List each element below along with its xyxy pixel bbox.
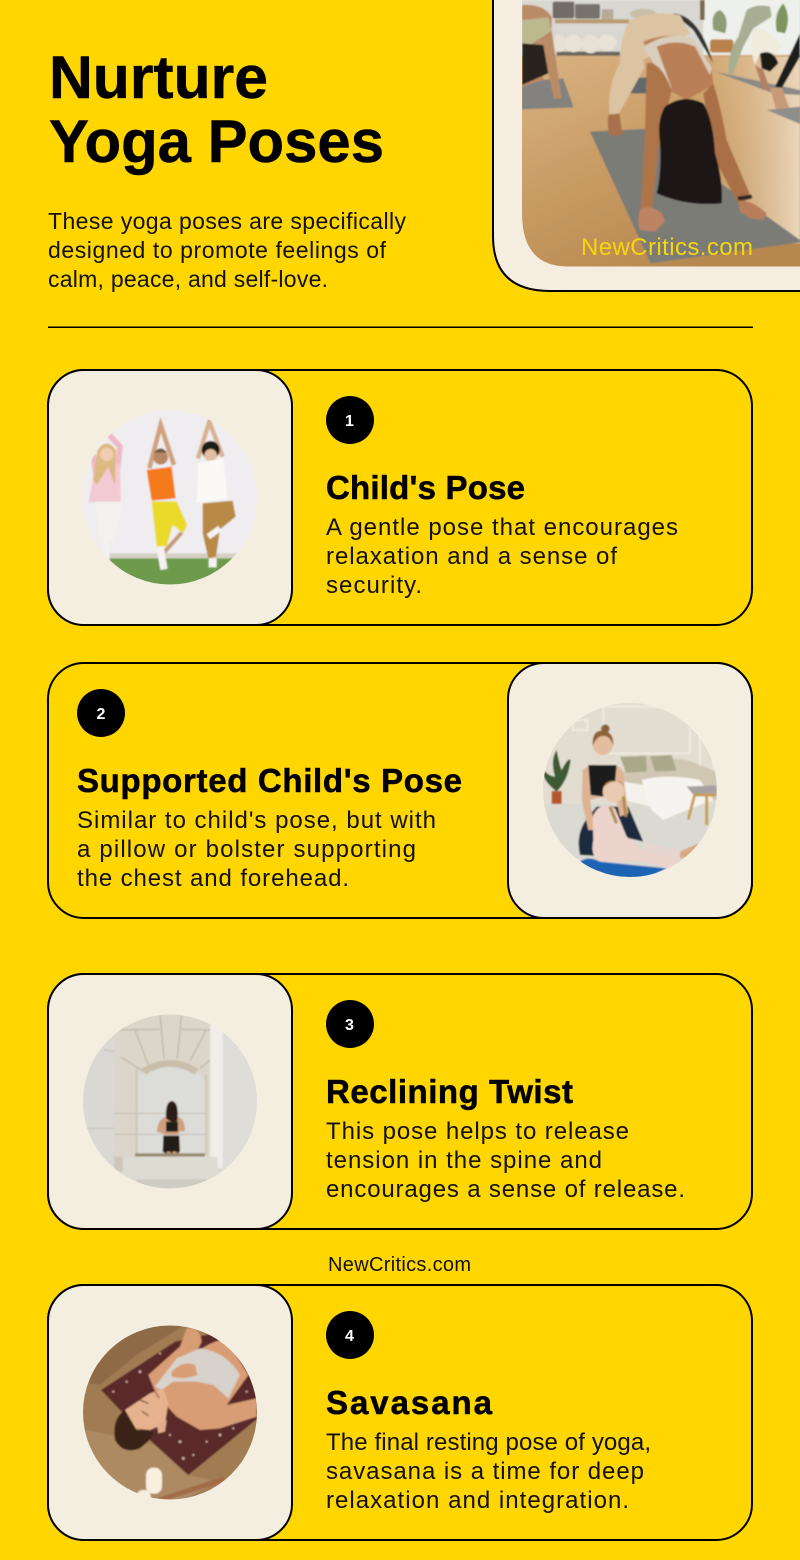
intro text: calm, peace, and self-love.	[48, 266, 328, 292]
card outline	[48, 663, 752, 918]
badge 1	[326, 396, 374, 444]
description: the chest and forehead.	[77, 865, 349, 892]
description: savasana is a time for deep	[326, 1458, 644, 1485]
image tile	[48, 370, 292, 625]
badge 2: 2	[97, 706, 106, 723]
photo: mother and daughter in bedroom	[540, 700, 720, 880]
photo: woman resting on mat	[80, 1322, 260, 1503]
heading: Savasana	[326, 1384, 493, 1421]
photo: woman in stone niche	[80, 1012, 260, 1192]
badge 2	[77, 689, 125, 737]
badge 4	[326, 1311, 374, 1359]
heading: Supported Child's Pose	[77, 762, 462, 799]
panel: Reclining Twist	[48, 974, 752, 1229]
description: The final resting pose of yoga,	[326, 1429, 651, 1456]
description: This pose helps to release	[326, 1118, 629, 1145]
description: a pillow or bolster supporting	[77, 836, 416, 863]
divider	[48, 326, 753, 328]
intro text	[48, 208, 406, 292]
card outline	[48, 1285, 752, 1540]
description: encourages a sense of release.	[326, 1176, 685, 1203]
hero frame	[493, 0, 800, 291]
watermark: NewCritics.com: NewCritics.com	[328, 1254, 471, 1276]
badge 4: 4	[345, 1328, 354, 1345]
panel: Child's Pose	[48, 370, 752, 625]
title: Yoga Poses	[49, 108, 384, 175]
description: relaxation and a sense of	[326, 543, 617, 570]
photo: three children in tree pose	[80, 407, 260, 588]
description	[326, 514, 678, 599]
image tile	[48, 1285, 292, 1540]
description	[326, 1118, 685, 1203]
description: security.	[326, 572, 422, 599]
description: tension in the spine and	[326, 1147, 602, 1174]
badge 3: 3	[345, 1017, 354, 1034]
panel: Supported Child's Pose	[48, 663, 752, 918]
image tile	[508, 663, 752, 918]
description: relaxation and integration.	[326, 1487, 629, 1514]
heading: Child's Pose	[326, 469, 525, 506]
image tile	[48, 974, 292, 1229]
intro text: These yoga poses are specifically	[48, 208, 406, 234]
badge 3	[326, 1000, 374, 1048]
card outline	[48, 974, 752, 1229]
title: Nurture	[49, 44, 268, 111]
hero card with photo	[493, 0, 800, 291]
description: A gentle pose that encourages	[326, 514, 678, 541]
card outline	[48, 370, 752, 625]
panel: Savasana	[48, 1285, 752, 1540]
description	[326, 1429, 651, 1514]
badge 1: 1	[345, 413, 354, 430]
heading: Reclining Twist	[326, 1073, 573, 1110]
description	[77, 807, 436, 892]
watermark: NewCritics.com	[581, 234, 753, 261]
description: Similar to child's pose, but with	[77, 807, 436, 834]
title	[49, 44, 384, 175]
intro text: designed to promote feelings of	[48, 237, 387, 263]
hero photo: downward dog class	[520, 0, 800, 268]
